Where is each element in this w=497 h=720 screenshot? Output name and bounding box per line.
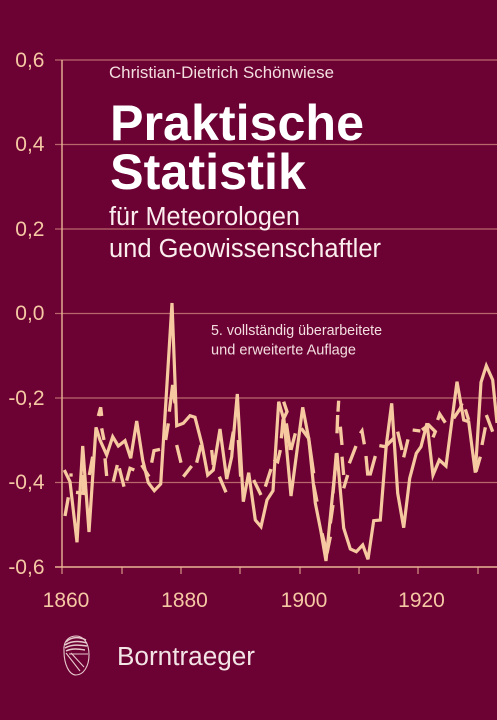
edition note (211, 323, 382, 358)
publisher name: Borntraeger (117, 641, 255, 671)
title: Praktische (110, 95, 364, 151)
y axis labels: -0,6 (8, 556, 44, 579)
y axis labels: 0,6 (15, 49, 44, 72)
author: Christian-Dietrich Schönwiese (109, 63, 334, 82)
dashed data line (65, 385, 493, 553)
subtitle: für Meteorologen (109, 203, 300, 231)
y axis labels: 0,2 (15, 218, 44, 241)
edition note: und erweiterte Auflage (211, 342, 356, 358)
x axis labels: 1900 (281, 589, 327, 612)
y axis labels: 0,0 (15, 302, 44, 325)
y axis labels (8, 49, 45, 579)
edition note: 5. vollständig überarbeitete (211, 323, 382, 339)
title (110, 95, 364, 200)
y axis labels: -0,4 (8, 471, 45, 494)
x axis labels (43, 589, 445, 612)
chart axes (55, 60, 497, 574)
title: Statistik (110, 144, 306, 200)
icon: publisher logo (64, 636, 89, 675)
subtitle (109, 203, 381, 263)
subtitle: und Geowissenschaftler (109, 235, 381, 263)
x axis labels: 1860 (43, 589, 89, 612)
y axis labels: 0,4 (15, 133, 45, 156)
x axis labels: 1920 (398, 589, 445, 612)
solid data line (64, 303, 497, 561)
y axis labels: -0,2 (8, 387, 44, 410)
x axis labels: 1880 (161, 589, 208, 612)
